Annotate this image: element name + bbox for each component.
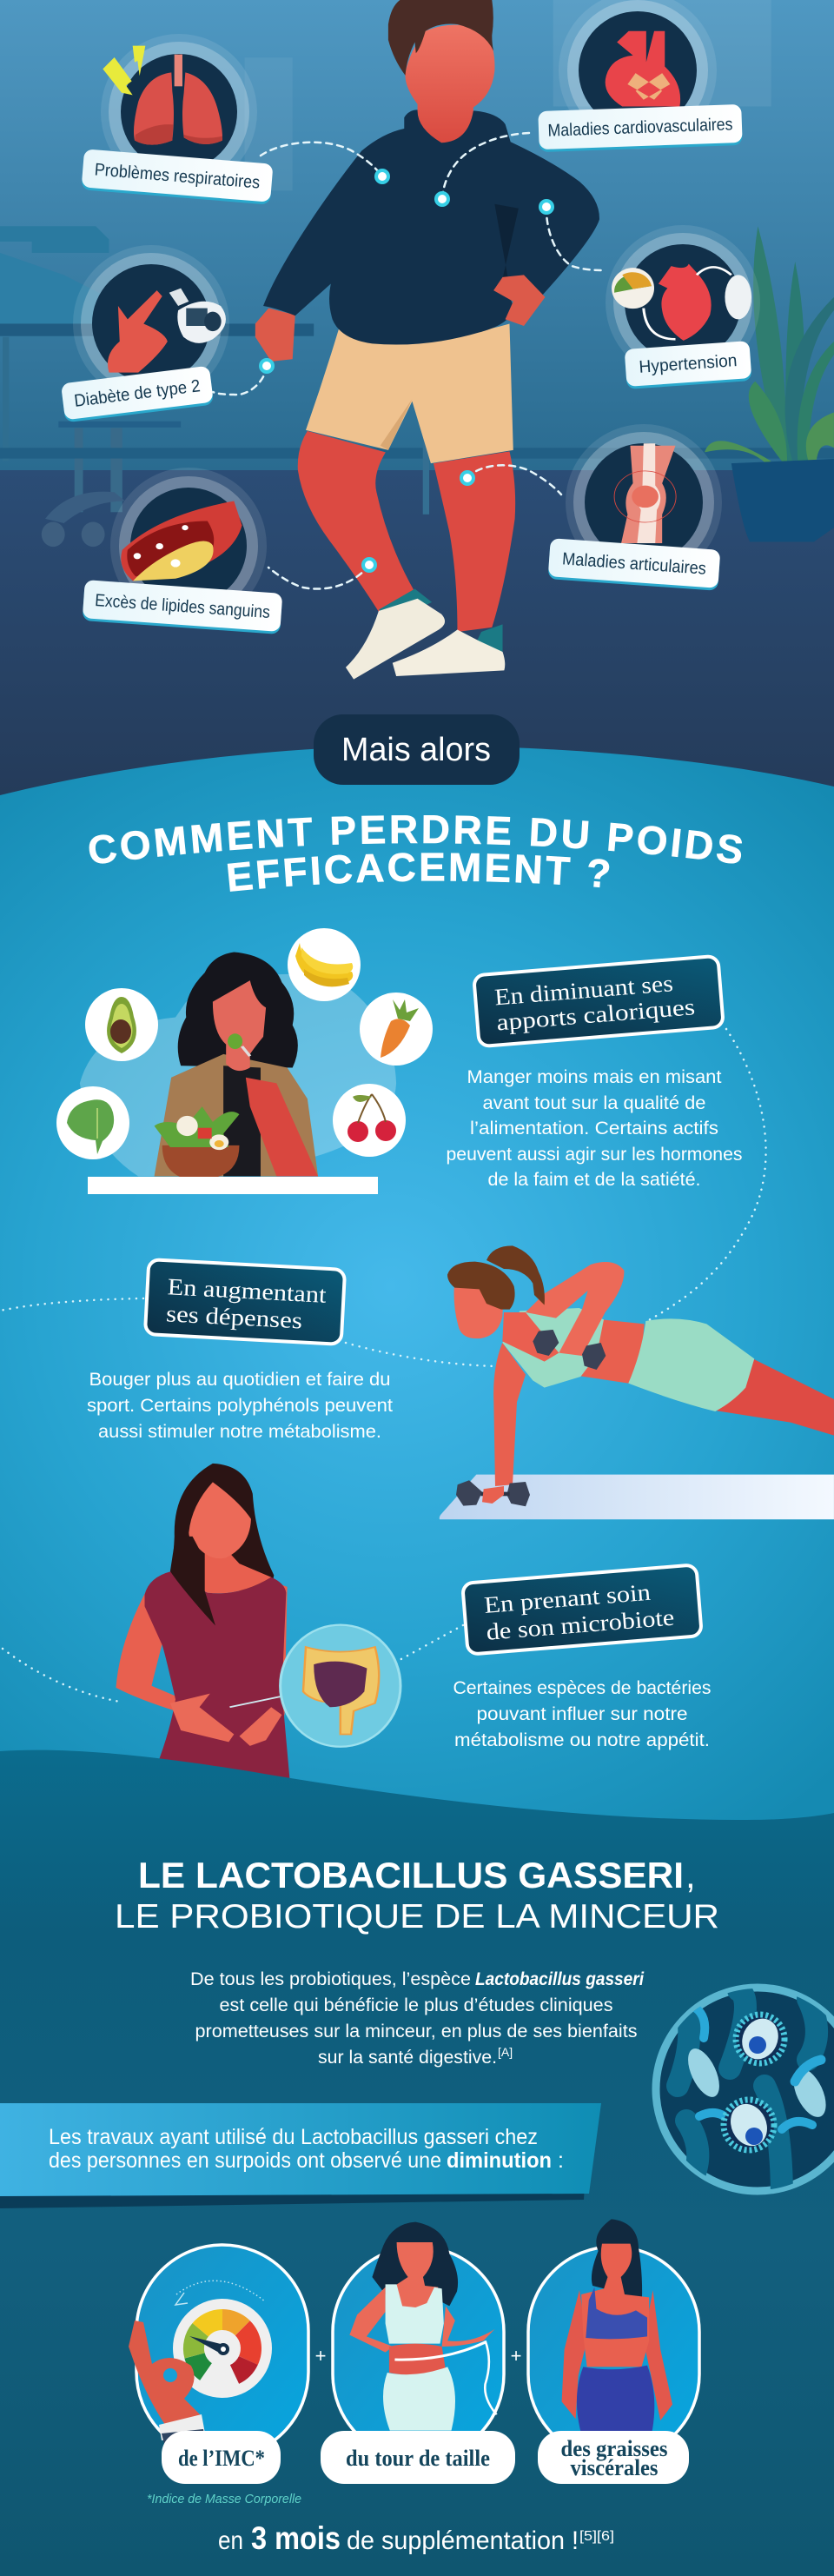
label: lipids: Excès de lipides sanguins xyxy=(94,591,271,622)
head xyxy=(454,1286,504,1338)
band: studies: : xyxy=(558,2148,564,2173)
illustration: plank woman xyxy=(440,1245,834,1519)
text block: probiotics: est celle qui bénéficie le plus d’études cliniques xyxy=(219,1995,613,2015)
band: studies: diminution xyxy=(447,2148,552,2173)
hair xyxy=(178,953,298,1068)
food circle: banana xyxy=(288,928,361,1001)
text block: calories xyxy=(447,1067,742,1190)
card: reduce calories: En diminuant ses xyxy=(493,970,674,1011)
shorts xyxy=(628,1318,754,1411)
label: cardiovascular: Maladies cardiovasculaires xyxy=(547,115,733,141)
text block: spending: aussi stimuler notre métabolisme. xyxy=(98,1422,381,1442)
dotted connectors xyxy=(0,1029,766,1702)
text block: spending: Bouger plus au quotidien et faire du xyxy=(89,1370,391,1390)
left hand xyxy=(255,309,295,362)
plant xyxy=(705,226,834,541)
label: cardiovascular xyxy=(538,104,743,152)
medallion: lungs xyxy=(101,34,257,190)
text block: microbiota xyxy=(453,1678,711,1750)
text block: probiotics xyxy=(190,1969,645,2068)
label: joints xyxy=(548,538,720,591)
food circle: carrot xyxy=(360,993,433,1066)
band: studies: des personnes en surpoids ont observé une xyxy=(49,2148,441,2173)
pill: visceral fat xyxy=(538,2431,689,2484)
heading: lactobacillus: , xyxy=(685,1855,696,1895)
heading: lactobacillus: LE PROBIOTIQUE DE LA MINCEUR xyxy=(115,1898,719,1935)
label: hypertension: Hypertension xyxy=(639,351,738,377)
arch: BMI xyxy=(129,2245,308,2464)
label: respiratory xyxy=(81,149,273,205)
band: studies xyxy=(0,2103,601,2208)
connector lines xyxy=(213,133,604,589)
dark wave section background xyxy=(0,1750,834,2576)
plus signs: + xyxy=(511,2345,521,2367)
text block: calories: Manger moins mais en misant xyxy=(467,1067,722,1087)
label: lipids xyxy=(83,580,282,634)
jacket xyxy=(155,1054,318,1177)
pill: Mais alors: Mais alors xyxy=(341,732,491,768)
pill: Mais alors xyxy=(314,714,520,785)
title: COMMENT PERDRE DU POIDS xyxy=(89,815,742,864)
table xyxy=(88,1177,378,1194)
text block: probiotics: [A] xyxy=(498,2045,513,2059)
card: microbiota xyxy=(462,1564,702,1655)
label: respiratory: Problèmes respiratoires xyxy=(94,160,261,193)
band: studies: Les travaux ayant utilisé du Lactobacillus gasseri chez xyxy=(49,2125,538,2149)
neck and face xyxy=(171,1552,271,1593)
card: microbiota: En prenant soin xyxy=(483,1579,652,1618)
illustration: woman eating xyxy=(80,953,396,1180)
text block: calories: l’alimentation. Certains actifs xyxy=(470,1119,718,1139)
medallion: diabetes xyxy=(73,245,229,402)
pill: BMI: de l’IMC* xyxy=(178,2446,265,2471)
hair strand xyxy=(170,1537,215,1626)
closing line xyxy=(218,2520,614,2556)
food circle: avocado xyxy=(85,988,158,1061)
head xyxy=(388,0,494,143)
text block: calories: peuvent aussi agir sur les hormones xyxy=(447,1145,742,1165)
label: hypertension xyxy=(625,341,751,389)
food circle: spinach xyxy=(56,1086,129,1159)
pointer xyxy=(229,1696,281,1707)
hoodie xyxy=(263,110,599,345)
label: diabetes: Diabète de type 2 xyxy=(73,376,202,411)
text block: probiotics: sur la santé digestive. xyxy=(318,2048,497,2068)
label: joints: Maladies articulaires xyxy=(561,549,707,579)
medallion: heart xyxy=(559,0,717,149)
heading: lactobacillus: LE LACTOBACILLUS GASSERI xyxy=(138,1855,684,1895)
gauge xyxy=(173,2299,272,2398)
blue section background xyxy=(0,746,834,1842)
man figure xyxy=(255,0,599,680)
text block: microbiota: pouvant influer sur notre xyxy=(476,1704,688,1724)
medallion: lipids xyxy=(110,468,267,624)
arm raised xyxy=(526,1262,624,1356)
hair back xyxy=(170,1464,274,1590)
heading: lactobacillus xyxy=(115,1855,719,1935)
text block: calories: avant tout sur la qualité de xyxy=(483,1093,705,1113)
footnote: *Indice de Masse Corporelle xyxy=(147,2492,301,2506)
text block: probiotics: De tous les probiotiques, l’espèce xyxy=(190,1969,471,1989)
closing line: en xyxy=(218,2526,243,2555)
dumbbells xyxy=(533,1330,559,1356)
bacteria circle xyxy=(656,1988,834,2199)
title: EFFICACEMENT ? xyxy=(228,853,610,892)
pill: visceral fat: viscérales xyxy=(570,2455,659,2480)
marker dots xyxy=(261,170,553,571)
text block: calories: de la faim et de la satiété. xyxy=(488,1170,700,1190)
medallion: joints xyxy=(566,424,722,581)
shorts xyxy=(306,323,513,463)
text block: microbiota: métabolisme ou notre appétit. xyxy=(454,1730,710,1750)
right hand xyxy=(493,275,546,326)
card: increase spending xyxy=(145,1259,345,1344)
room background xyxy=(0,0,834,818)
hand xyxy=(129,2320,208,2464)
legs xyxy=(298,431,515,632)
medallion: hypertension xyxy=(606,225,760,380)
bowl xyxy=(162,1145,239,1180)
label: diabetes xyxy=(61,366,214,422)
top xyxy=(502,1308,604,1388)
text block: spending: sport. Certains polyphénols peuvent xyxy=(87,1396,393,1416)
gut bubble xyxy=(281,1625,400,1747)
mat xyxy=(440,1475,834,1519)
pill: BMI xyxy=(162,2431,281,2484)
pill: waist: du tour de taille xyxy=(346,2446,490,2471)
card: reduce calories xyxy=(473,956,724,1046)
closing line: [5][6] xyxy=(579,2529,614,2544)
arch: waist xyxy=(333,2222,504,2460)
pill: visceral fat: des graisses xyxy=(561,2436,667,2461)
shirt xyxy=(145,1571,290,1781)
plus signs xyxy=(315,2345,521,2367)
illustration: woman with microbiota xyxy=(116,1464,400,1781)
text block: probiotics: prometteuses sur la minceur, en plus de ses bienfaits xyxy=(195,2022,638,2042)
card: microbiota: de son microbiote xyxy=(486,1604,675,1645)
pill: waist xyxy=(321,2431,515,2484)
card: increase spending: ses dépenses xyxy=(165,1300,303,1333)
card: increase spending: En augmentant xyxy=(167,1273,328,1308)
shoes xyxy=(346,589,505,680)
text block: spending xyxy=(87,1370,393,1442)
hands xyxy=(170,1694,234,1742)
plus signs: + xyxy=(315,2345,326,2367)
arch: visceral fat xyxy=(528,2219,699,2460)
food circle: cherries xyxy=(333,1084,406,1157)
arms xyxy=(116,1590,183,1711)
closing line: de supplémentation ! xyxy=(347,2526,579,2555)
face xyxy=(213,980,266,1071)
text block: probiotics: Lactobacillus gasseri xyxy=(475,1969,645,1989)
text block: microbiota: Certaines espèces de bactéries xyxy=(453,1678,711,1698)
body xyxy=(493,1343,526,1486)
closing line: 3 mois xyxy=(251,2520,341,2556)
title xyxy=(89,815,742,892)
card: reduce calories: apports caloriques xyxy=(495,993,696,1035)
